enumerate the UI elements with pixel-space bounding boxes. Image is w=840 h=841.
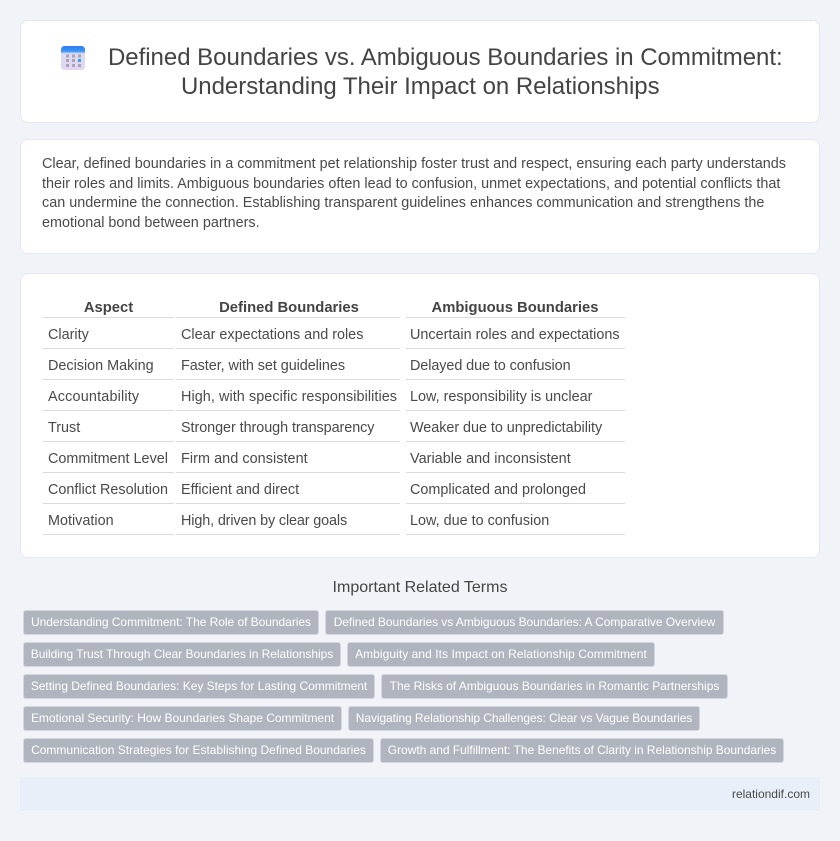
tag: Growth and Fulfillment: The Benefits of Clarity in Relationship Boundaries bbox=[388, 743, 776, 757]
tag: Setting Defined Boundaries: Key Steps for Lasting Commitment bbox=[31, 679, 367, 693]
row: conflict resolution: Conflict Resolution bbox=[48, 482, 168, 498]
tag bbox=[381, 674, 728, 699]
column headers: Defined Boundaries bbox=[219, 300, 359, 316]
row: clarity: Clear expectations and roles bbox=[181, 327, 363, 343]
tag: Navigating Relationship Challenges: Clear vs Vague Boundaries bbox=[356, 711, 692, 725]
row: accountability: Accountability bbox=[48, 389, 139, 405]
row: commitment level: Commitment Level bbox=[48, 451, 168, 467]
row: accountability: Low, responsibility is unclear bbox=[410, 389, 592, 405]
column headers: Aspect bbox=[84, 300, 133, 316]
row: clarity bbox=[48, 327, 620, 343]
panel: comparison table bbox=[20, 273, 820, 558]
row: trust: Stronger through transparency bbox=[181, 420, 374, 436]
tag: Ambiguity and Its Impact on Relationship Commitment bbox=[355, 647, 647, 661]
row: conflict resolution bbox=[48, 482, 586, 498]
row: decision making: Decision Making bbox=[48, 358, 154, 374]
tag bbox=[23, 610, 319, 635]
row: clarity: Uncertain roles and expectations bbox=[410, 327, 620, 343]
row: motivation: Motivation bbox=[48, 513, 114, 529]
tag: Understanding Commitment: The Role of Boundaries bbox=[31, 615, 311, 629]
row: decision making: Delayed due to confusion bbox=[410, 358, 570, 374]
column headers: Ambiguous Boundaries bbox=[432, 300, 598, 316]
tag: The Risks of Ambiguous Boundaries in Romantic Partnerships bbox=[390, 679, 719, 693]
panel: title card bbox=[20, 20, 820, 123]
tag bbox=[348, 706, 700, 731]
comparison table bbox=[43, 300, 625, 535]
row: clarity: Clarity bbox=[48, 327, 89, 343]
footer bbox=[20, 777, 820, 811]
row: accountability bbox=[48, 389, 592, 405]
tag: Emotional Security: How Boundaries Shape Commitment bbox=[31, 711, 334, 725]
row: motivation: Low, due to confusion bbox=[410, 513, 549, 529]
heading: important related terms: Important Related Terms bbox=[333, 579, 507, 596]
text block: introduction: can undermine the connection. Establishing transparent guidelines enhances communication and strengthens the bbox=[42, 195, 764, 211]
tag: Communication Strategies for Establishing Defined Boundaries bbox=[31, 743, 366, 757]
text block: introduction: Clear, defined boundaries in a commitment pet relationship foster trust and respect, ensuring each party understands bbox=[42, 156, 786, 172]
tag bbox=[23, 706, 342, 731]
row: accountability: High, with specific responsibilities bbox=[181, 389, 397, 405]
icon: calendar bbox=[61, 46, 85, 70]
tag: Building Trust Through Clear Boundaries in Relationships bbox=[31, 647, 333, 661]
row: conflict resolution: Efficient and direct bbox=[181, 482, 299, 498]
tag bbox=[325, 610, 724, 635]
row: decision making bbox=[48, 358, 570, 374]
column headers bbox=[84, 300, 598, 316]
row: trust: Trust bbox=[48, 420, 80, 436]
tag bbox=[23, 642, 341, 667]
row: commitment level bbox=[48, 451, 571, 467]
tag bbox=[380, 738, 784, 763]
row: commitment level: Variable and inconsistent bbox=[410, 451, 571, 467]
row: decision making: Faster, with set guidelines bbox=[181, 358, 345, 374]
title: Defined Boundaries vs. Ambiguous Boundaries in Commitment: bbox=[108, 44, 783, 71]
row: motivation bbox=[48, 513, 549, 529]
title: Understanding Their Impact on Relationships bbox=[181, 73, 660, 100]
row: commitment level: Firm and consistent bbox=[181, 451, 308, 467]
tag bbox=[23, 674, 375, 699]
text block: introduction: emotional bond between partners. bbox=[42, 215, 260, 231]
title bbox=[108, 44, 783, 100]
related terms tags bbox=[23, 610, 784, 763]
tag bbox=[347, 642, 655, 667]
text block: introduction: their roles and limits. Ambiguous boundaries often lead to confusion, unmet expectations, and potential conflicts that bbox=[42, 176, 780, 192]
tag: Defined Boundaries vs Ambiguous Boundaries: A Comparative Overview bbox=[334, 615, 715, 629]
row: motivation: High, driven by clear goals bbox=[181, 513, 347, 529]
text block: introduction bbox=[42, 156, 786, 231]
row: trust bbox=[48, 420, 602, 436]
footer source text: relationdif.com bbox=[732, 787, 810, 801]
tag bbox=[23, 738, 374, 763]
panel: introduction text bbox=[20, 139, 820, 254]
row: trust: Weaker due to unpredictability bbox=[410, 420, 602, 436]
row: conflict resolution: Complicated and prolonged bbox=[410, 482, 586, 498]
